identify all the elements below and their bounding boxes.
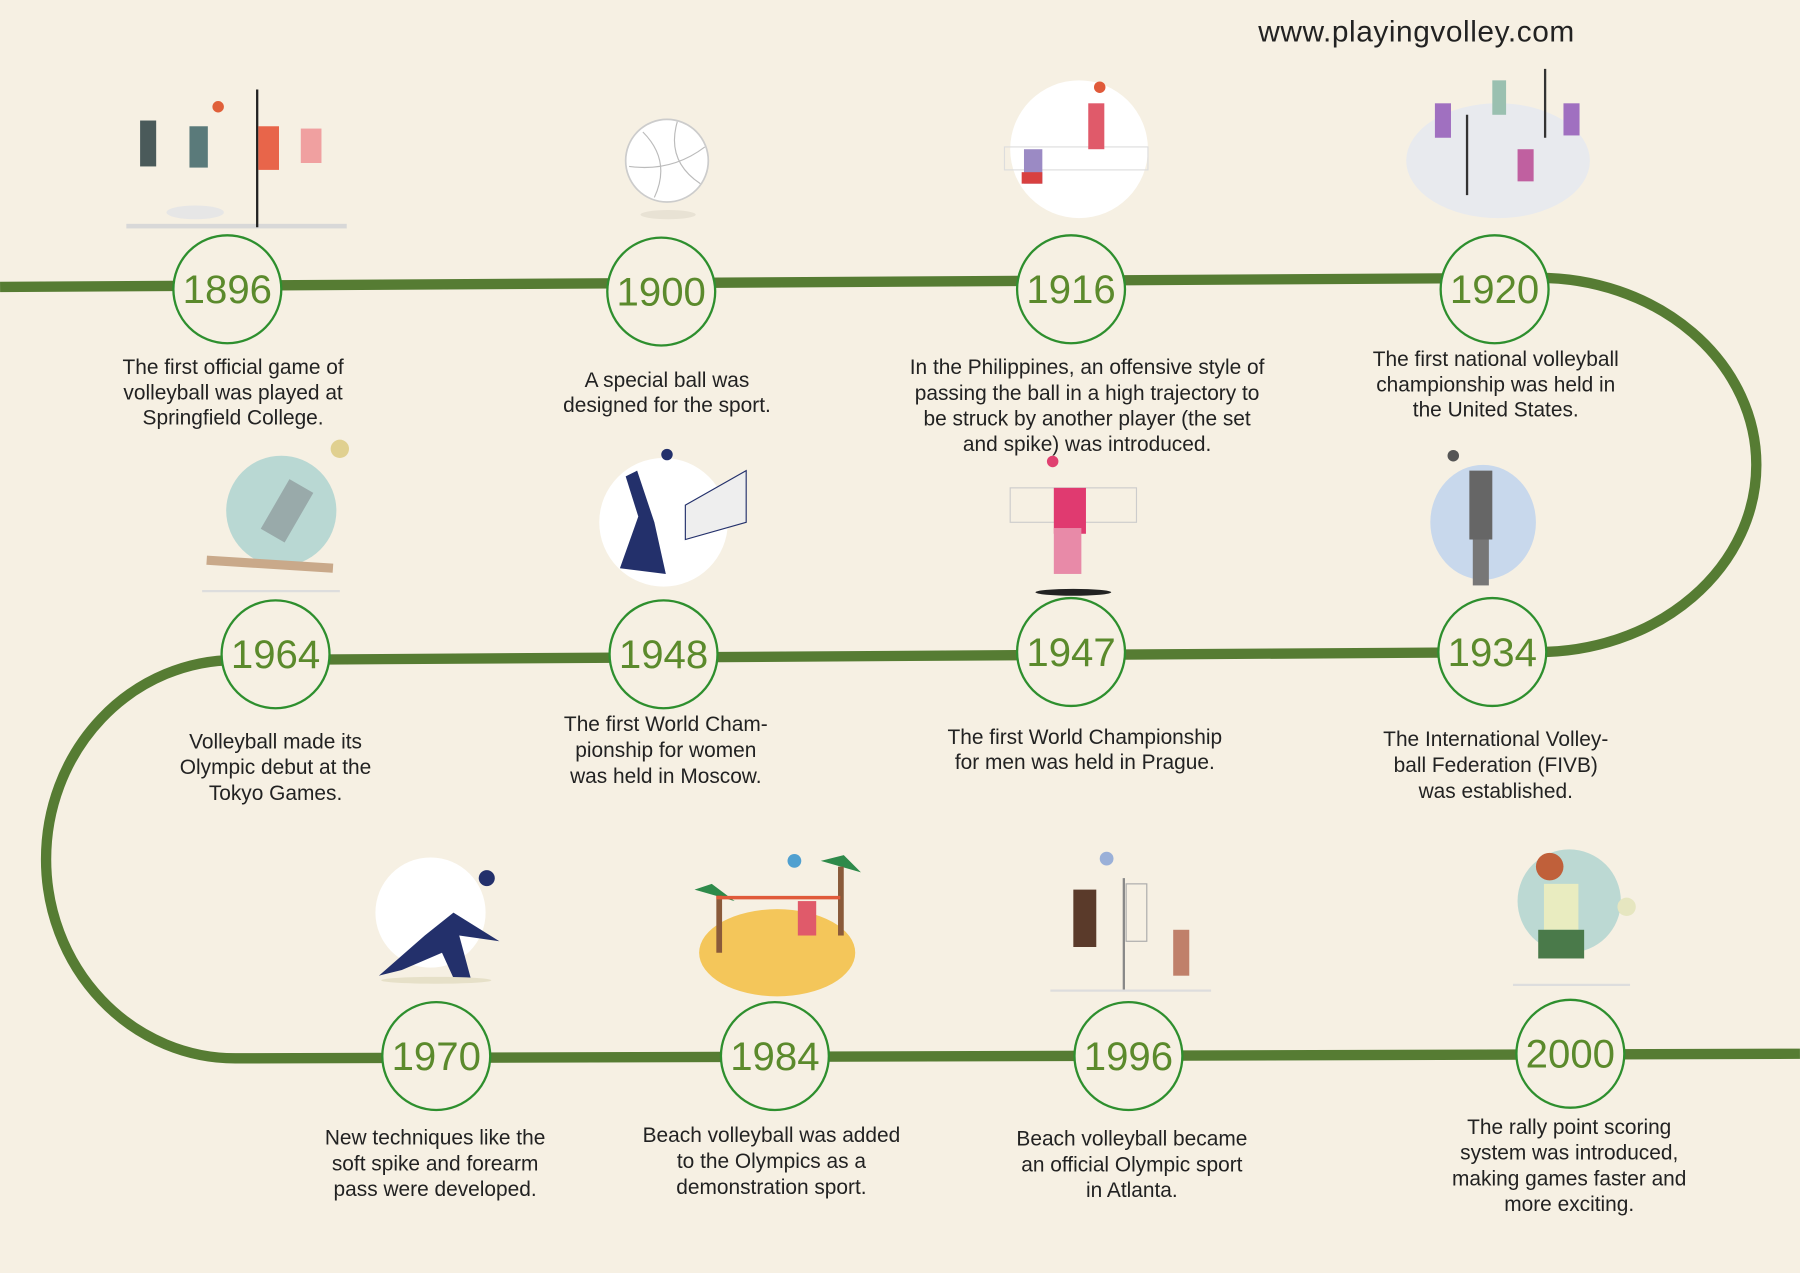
icons bbox=[126, 69, 1636, 996]
text 1948: The first World Cham- bbox=[564, 713, 768, 736]
text 1947: The first World Championship bbox=[948, 726, 1222, 749]
text 1916: passing the ball in a high trajectory to bbox=[915, 382, 1259, 405]
icon: 1900 ball bbox=[626, 119, 708, 219]
1916 bbox=[1017, 235, 1125, 343]
2000: 2000 bbox=[1526, 1032, 1615, 1077]
text 1996: in Atlanta. bbox=[1086, 1179, 1178, 1202]
icon: 1964 bbox=[202, 440, 349, 591]
icon: 1896 players bbox=[126, 90, 347, 228]
text 1996: an official Olympic sport bbox=[1021, 1153, 1243, 1176]
icon: 1948 bbox=[599, 449, 746, 587]
1896 bbox=[173, 235, 281, 343]
icon: 1984 bbox=[695, 854, 861, 996]
text 1934: ball Federation (FIVB) bbox=[1394, 754, 1598, 777]
1900: 1900 bbox=[617, 269, 706, 314]
1916: 1916 bbox=[1026, 267, 1116, 312]
text 1916: In the Philippines, an offensive style of bbox=[910, 356, 1265, 379]
text 1947: for men was held in Prague. bbox=[955, 751, 1215, 774]
icon: 1916 bbox=[1004, 80, 1148, 218]
1896: 1896 bbox=[183, 267, 272, 312]
text 1900: A special ball was bbox=[585, 369, 749, 392]
text 1934: The International Volley- bbox=[1383, 728, 1608, 751]
1964 bbox=[222, 600, 330, 708]
text 1970: soft spike and forearm bbox=[332, 1152, 538, 1175]
text 1964: Olympic debut at the bbox=[180, 756, 371, 779]
text 1900: designed for the sport. bbox=[563, 394, 771, 417]
text 1948: was held in Moscow. bbox=[569, 765, 762, 788]
icon: 1947 bbox=[1010, 456, 1136, 596]
year circles bbox=[173, 235, 1624, 1110]
url: www.playingvolley.com bbox=[1257, 15, 1575, 48]
text 1896: Springfield College. bbox=[143, 407, 324, 430]
text 1970: New techniques like the bbox=[325, 1126, 545, 1149]
text 1984: demonstration sport. bbox=[676, 1176, 867, 1199]
1948: 1948 bbox=[619, 632, 708, 677]
icon: 1970 bbox=[375, 857, 499, 984]
1900 bbox=[607, 238, 715, 346]
text 2000: system was introduced, bbox=[1460, 1142, 1678, 1165]
1970: 1970 bbox=[392, 1034, 481, 1079]
1964: 1964 bbox=[231, 632, 320, 677]
text 1984: Beach volleyball was added bbox=[643, 1124, 900, 1147]
text 2000: making games faster and bbox=[1452, 1167, 1686, 1190]
text 1996: Beach volleyball became bbox=[1016, 1128, 1247, 1151]
1934 bbox=[1438, 598, 1546, 706]
text 1920: championship was held in bbox=[1376, 373, 1615, 396]
text 1920: The first national volleyball bbox=[1373, 348, 1619, 371]
1984 bbox=[721, 1002, 829, 1110]
1947: 1947 bbox=[1026, 630, 1116, 675]
text 1964: Tokyo Games. bbox=[209, 782, 342, 805]
text 1948: pionship for women bbox=[575, 739, 756, 762]
1984: 1984 bbox=[730, 1034, 820, 1079]
icon: 2000 bbox=[1513, 849, 1636, 985]
timeline path bbox=[0, 278, 1800, 1058]
1934: 1934 bbox=[1448, 630, 1537, 675]
icon: 1934 bbox=[1430, 450, 1536, 585]
1996 bbox=[1074, 1002, 1182, 1110]
text 1916: be struck by another player (the set bbox=[923, 407, 1251, 430]
icon: 1920 bbox=[1406, 69, 1590, 218]
text 1896: The first official game of bbox=[122, 356, 344, 379]
text 1896: volleyball was played at bbox=[123, 381, 343, 404]
2000 bbox=[1516, 1000, 1624, 1108]
text 1916: and spike) was introduced. bbox=[963, 433, 1211, 456]
1948 bbox=[610, 600, 717, 708]
text 1984: to the Olympics as a bbox=[677, 1150, 866, 1173]
text 2000: more exciting. bbox=[1504, 1193, 1634, 1216]
1970 bbox=[382, 1002, 490, 1110]
text 1920: the United States. bbox=[1413, 399, 1579, 422]
text 2000: The rally point scoring bbox=[1467, 1116, 1671, 1139]
text 1970: pass were developed. bbox=[334, 1178, 537, 1201]
1920 bbox=[1441, 235, 1549, 343]
text 1964: Volleyball made its bbox=[189, 730, 362, 753]
1920: 1920 bbox=[1450, 267, 1539, 312]
text 1934: was established. bbox=[1418, 780, 1573, 803]
descriptions bbox=[122, 348, 1686, 1216]
icon: 1996 bbox=[1050, 852, 1211, 991]
1947 bbox=[1017, 598, 1125, 706]
1996: 1996 bbox=[1084, 1034, 1173, 1079]
